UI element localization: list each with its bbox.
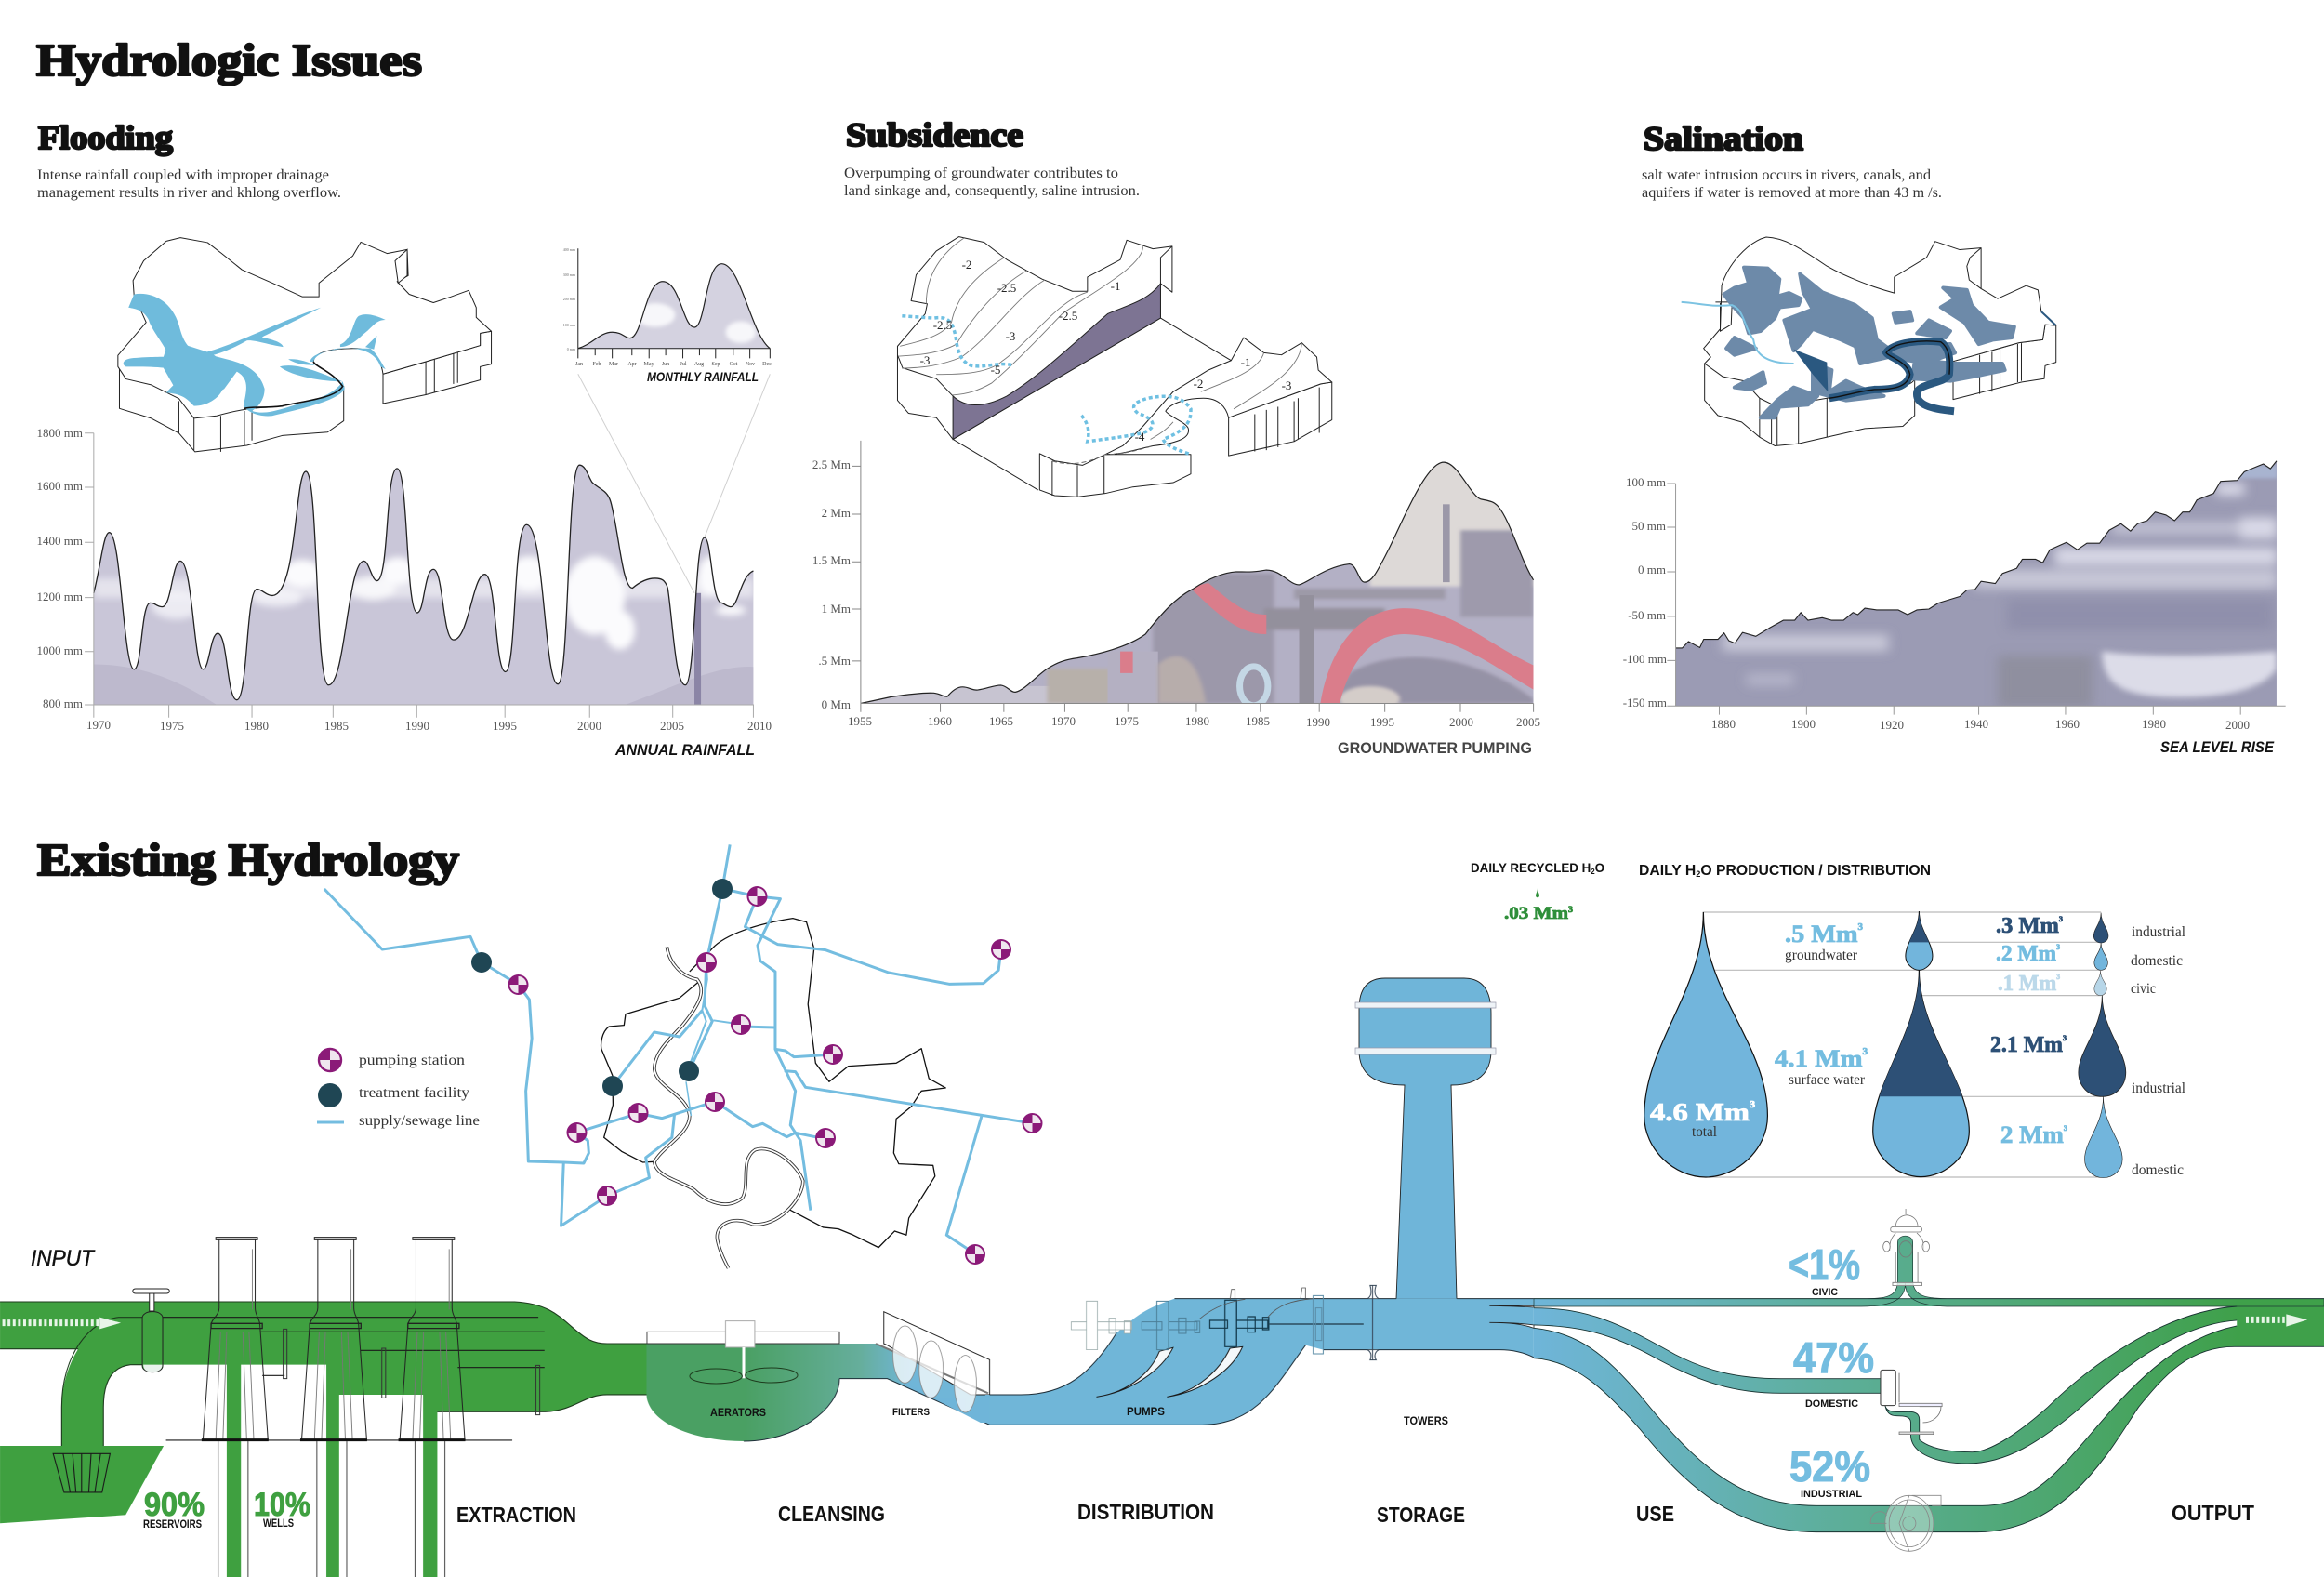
value: recycled: .03 Mm (1504, 904, 1562, 923)
text: flooding description: Intense rainfall coupled with improper drainage (37, 167, 329, 183)
chart: monthly rainfall: Mar (609, 362, 618, 367)
icon: pump wheel (1870, 1495, 1941, 1551)
values: drop quantities: 3 (2059, 915, 2063, 923)
axis labels: annual rainfall: 2000 (577, 719, 601, 733)
heading: production: O PRODUCTION / DISTRIBUTION (1700, 863, 1931, 879)
percentages: use by sector: 47% (1793, 1333, 1874, 1382)
icon: water tower (1355, 978, 1496, 1299)
chart: sea level rise area (1667, 461, 2286, 715)
text: subsidence description: land sinkage and, consequently, saline intrusion. (844, 183, 1140, 199)
map: subsidence contour labels: -3 (920, 353, 930, 367)
axis labels: groundwater pumping: 1960 (928, 714, 952, 728)
axis labels: sea level rise: -50 mm (1628, 608, 1666, 622)
value: recycled: 3 (1568, 905, 1574, 914)
axis labels: sea level rise: 1980 (2142, 717, 2166, 731)
axis labels: annual rainfall: 1985 (324, 719, 349, 733)
heading: production: 2 (1696, 869, 1700, 879)
stage labels: USE (1636, 1502, 1674, 1526)
panel: salination (1623, 120, 2286, 756)
stage labels: STORAGE (1377, 1503, 1465, 1527)
axis labels: groundwater pumping: 2.5 Mm (812, 457, 851, 471)
icon: supply line (317, 1121, 344, 1123)
stage labels: DISTRIBUTION (1077, 1500, 1214, 1524)
values: drop quantities: 2 Mm (2000, 1121, 2062, 1148)
percentages: sources: 90% (144, 1487, 205, 1523)
values: drop quantities: total (1692, 1124, 1717, 1140)
axis labels: sea level rise: 50 mm (1632, 519, 1666, 533)
chart: monthly rainfall: 400 mm (563, 247, 576, 252)
axis labels: annual rainfall: 1980 (244, 719, 269, 733)
label: daily recycled: 2 (1591, 868, 1595, 876)
chart: monthly rainfall (563, 247, 772, 384)
icon: reservoir intake (53, 1453, 110, 1492)
values: drop quantities: civic (2131, 981, 2156, 997)
legend labels (359, 1053, 480, 1129)
map: flooding isometric (118, 238, 492, 452)
stage labels (31, 1246, 2254, 1527)
axis labels: groundwater pumping: 1980 (1185, 714, 1209, 728)
values: drop quantities: 4.6 Mm (1650, 1098, 1732, 1126)
text: salination description: salt water intrusion occurs in rivers, canals, and (1642, 167, 1931, 183)
axis labels: groundwater pumping: 1975 (1115, 714, 1139, 728)
chart: monthly rainfall: Aug (694, 362, 704, 367)
heading: Salination: Salination (1644, 120, 1803, 157)
percentages: use by sector: <1% (1789, 1240, 1860, 1289)
heading: Existing Hydrology: Existing Hydrology (37, 834, 460, 885)
axis labels: groundwater pumping: 1955 (848, 714, 872, 728)
axis labels: annual rainfall: 1600 mm (37, 479, 83, 493)
axis labels: groundwater pumping: 1990 (1306, 715, 1330, 729)
legend labels: supply/sewage line (359, 1113, 480, 1129)
heading: production: DAILY H (1639, 863, 1695, 879)
axis labels: groundwater pumping: 1.5 Mm (812, 553, 851, 567)
values: drop quantities: 3 (1858, 922, 1863, 933)
axis labels: groundwater pumping (812, 457, 1540, 729)
title: Hydrologic Issues: Hydrologic Issues (36, 34, 422, 86)
heading: Flooding: Flooding (38, 119, 173, 156)
chart: monthly rainfall: 100 mm (563, 323, 576, 327)
axis labels: groundwater pumping: 1970 (1051, 714, 1076, 728)
values: drop quantities: .3 Mm (1996, 914, 2058, 938)
axis labels: groundwater pumping: 1985 (1246, 714, 1270, 728)
panel: subsidence (812, 116, 1540, 757)
map: subsidence contour labels (920, 258, 1291, 444)
stage labels: CLEANSING (778, 1502, 885, 1526)
heading: Subsidence: Subsidence (846, 116, 1023, 153)
flooded area (124, 294, 386, 416)
icon: pumping station (318, 1048, 342, 1072)
values: drop quantities: 3 (2064, 1124, 2067, 1133)
axis labels: annual rainfall: 1990 (405, 719, 429, 733)
values: drop quantities: domestic (2131, 953, 2183, 969)
axis labels: sea level rise: -100 mm (1623, 652, 1667, 666)
panel: flooding (37, 119, 772, 759)
axis labels: groundwater pumping: 2000 (1449, 715, 1473, 729)
map: subsidence contour labels: -1 (1111, 279, 1120, 293)
pipe: aerators and filters and pumps (646, 1285, 1534, 1441)
chart: monthly rainfall: Jul (680, 362, 687, 367)
stage labels: FILTERS (892, 1407, 930, 1418)
text: flooding description: management results in river and khlong overflow. (37, 185, 341, 201)
chart: monthly rainfall: Apr (627, 362, 637, 367)
map: subsidence contour labels: -2.5 (997, 281, 1016, 295)
stage labels: PUMPS (1127, 1405, 1165, 1418)
icons: treatment facilities (471, 879, 733, 1096)
axis labels: annual rainfall: 2010 (747, 719, 772, 733)
values: drop quantities (1650, 914, 2185, 1178)
chart: monthly rainfall: Jun (662, 362, 669, 367)
axis labels: annual rainfall: 1200 mm (37, 590, 83, 603)
chart: monthly rainfall: Feb (593, 362, 601, 367)
values: drop quantities: groundwater (1785, 948, 1858, 963)
icon: small green drop (1536, 888, 1539, 897)
map: salination isometric (1682, 237, 2056, 445)
axis labels: annual rainfall: 800 mm (43, 696, 83, 710)
values: drop quantities: 3 (2056, 943, 2060, 951)
chart: groundwater pumping area (852, 441, 1536, 712)
percentages: sources: RESERVOIRS (143, 1519, 202, 1531)
percentages: use by sector: DOMESTIC (1805, 1398, 1858, 1410)
icon: screw filter (876, 1312, 990, 1423)
axis labels: sea level rise: 1960 (2055, 717, 2080, 731)
chart: monthly rainfall: Jan (575, 362, 583, 367)
map: subsidence contour labels: -1 (1241, 355, 1250, 369)
icon: pumps (1071, 1285, 1379, 1397)
axis labels: sea level rise: 1940 (1964, 717, 1988, 731)
chart: monthly rainfall: 0 mm (567, 347, 576, 351)
caption: monthly rainfall: MONTHLY RAINFALL (647, 370, 759, 384)
text: salination description (1642, 167, 1942, 201)
values: drop quantities: .1 Mm (1998, 972, 2060, 996)
axis labels: annual rainfall (37, 426, 772, 733)
arrow: output flow (2246, 1314, 2307, 1327)
chart: monthly rainfall: 200 mm (563, 297, 576, 301)
stage labels: AERATORS (710, 1406, 766, 1419)
chart: annual rainfall area (85, 374, 770, 718)
icon: hydrant (1883, 1209, 1930, 1286)
legend: network map (317, 1048, 480, 1129)
map: subsidence contour labels: -2.5 (933, 318, 952, 332)
text: subsidence description: Overpumping of groundwater contributes to (844, 166, 1118, 181)
map: subsidence contour labels: -2 (1194, 377, 1203, 391)
map: supply and sewage network (324, 844, 1043, 1268)
text: salination description: aquifers if water is removed at more than 43 m /s. (1642, 185, 1942, 201)
axis labels: sea level rise: -150 mm (1623, 696, 1667, 709)
percentages: sources: WELLS (263, 1518, 294, 1530)
chart: monthly rainfall: May (643, 362, 654, 367)
panel: daily production and distribution (1639, 863, 2185, 1178)
chart: water drops (1644, 911, 2126, 1178)
chart: monthly rainfall: 300 mm (563, 272, 576, 277)
values: drop quantities: 3 (1862, 1047, 1868, 1057)
axis labels: sea level rise: 2000 (2225, 718, 2250, 732)
axis labels: groundwater pumping: 1 Mm (822, 602, 851, 616)
values: drop quantities: .5 Mm (1785, 921, 1852, 948)
caption: annual rainfall: ANNUAL RAINFALL (614, 741, 755, 759)
intrusion zones (1724, 268, 2014, 417)
text: flooding description (37, 167, 341, 201)
values: drop quantities: surface water (1789, 1072, 1866, 1088)
axis labels: sea level rise (1623, 475, 2250, 732)
axis labels: annual rainfall: 1000 mm (37, 643, 83, 657)
map: subsidence contour labels: -4 (1135, 430, 1145, 444)
axis labels: annual rainfall: 1970 (86, 718, 111, 732)
stage labels: INPUT (31, 1246, 96, 1271)
map: subsidence contour labels: -2.5 (1059, 309, 1077, 323)
chart: monthly rainfall: Sep (712, 362, 720, 367)
map: subsidence contour labels: -3 (1282, 378, 1291, 392)
values: drop quantities: 4.1 Mm (1775, 1045, 1854, 1072)
axis labels: annual rainfall: 2005 (660, 719, 684, 733)
arrow: input flow (3, 1318, 121, 1329)
label: daily recycled: DAILY RECYCLED H (1471, 860, 1596, 875)
axis labels: annual rainfall: 1800 mm (37, 426, 83, 440)
percentages: use by sector: 52% (1789, 1442, 1870, 1491)
chart: monthly rainfall: Dec (762, 362, 772, 367)
axis labels: sea level rise: 0 mm (1638, 563, 1666, 576)
axis labels: sea level rise: 100 mm (1626, 475, 1666, 489)
values: drop quantities: 3 (2056, 973, 2060, 981)
axis labels: groundwater pumping: 1965 (989, 714, 1013, 728)
map: subsidence contour labels: -3 (1006, 329, 1015, 343)
axis labels: annual rainfall: 1975 (160, 719, 184, 733)
map: subsidence contour labels: -2 (962, 258, 971, 272)
values: drop quantities: 2.1 Mm (1990, 1033, 2064, 1057)
stage labels: TOWERS (1404, 1414, 1448, 1427)
values: drop quantities: domestic (2132, 1162, 2184, 1178)
icon: valve (133, 1289, 169, 1372)
percentages: sources: 10% (254, 1487, 310, 1523)
axis labels: groundwater pumping: 2 Mm (822, 506, 851, 520)
axis labels: sea level rise: 1920 (1880, 718, 1904, 732)
icon: treatment facility (318, 1083, 342, 1107)
percentages: sources (143, 1487, 310, 1531)
axis labels: annual rainfall: 1995 (493, 719, 517, 733)
caption: groundwater pumping: GROUNDWATER PUMPING (1338, 739, 1532, 757)
stage labels: EXTRACTION (456, 1503, 576, 1527)
values: drop quantities: industrial (2132, 924, 2185, 940)
icon: toilet (1881, 1370, 1942, 1435)
icons: pumping stations (508, 886, 1043, 1265)
stage labels: OUTPUT (2172, 1501, 2254, 1525)
percentages: use by sector: INDUSTRIAL (1801, 1489, 1862, 1500)
axis labels: groundwater pumping: 1995 (1370, 715, 1394, 729)
pipe: extraction section (0, 1238, 649, 1577)
percentages: use by sector: CIVIC (1812, 1287, 1838, 1298)
values: drop quantities: 3 (2063, 1034, 2067, 1042)
axis labels: sea level rise: 1900 (1791, 717, 1816, 731)
text: subsidence description (844, 166, 1140, 199)
icon: aerator (647, 1321, 839, 1384)
icon: well heads (202, 1238, 466, 1577)
caption: sea level rise: SEA LEVEL RISE (2160, 738, 2275, 756)
panel: water cycle pipeline (0, 978, 2324, 1577)
axis labels: groundwater pumping: 0 Mm (822, 697, 851, 711)
chart: monthly rainfall: Nov (746, 362, 755, 367)
panel: daily recycled water (1471, 860, 1604, 923)
axis labels: groundwater pumping: .5 Mm (818, 654, 851, 668)
axis labels: sea level rise: 1880 (1711, 717, 1736, 731)
chart: monthly rainfall: Oct (730, 362, 738, 367)
axis labels: groundwater pumping: 2005 (1516, 715, 1540, 729)
values: drop quantities: 3 (1750, 1100, 1755, 1110)
map: subsidence exploded isometric (897, 237, 1332, 497)
values: drop quantities: industrial (2132, 1080, 2185, 1096)
percentages: use by sector (1789, 1240, 1874, 1500)
pipe: use and output (1534, 1209, 2324, 1551)
axis labels: annual rainfall: 1400 mm (37, 534, 83, 548)
values: drop quantities: .2 Mm (1996, 942, 2058, 966)
label: daily recycled: O (1595, 860, 1604, 875)
legend labels: pumping station (359, 1053, 465, 1068)
legend labels: treatment facility (359, 1085, 469, 1101)
map: subsidence contour labels: -5 (991, 363, 1000, 377)
